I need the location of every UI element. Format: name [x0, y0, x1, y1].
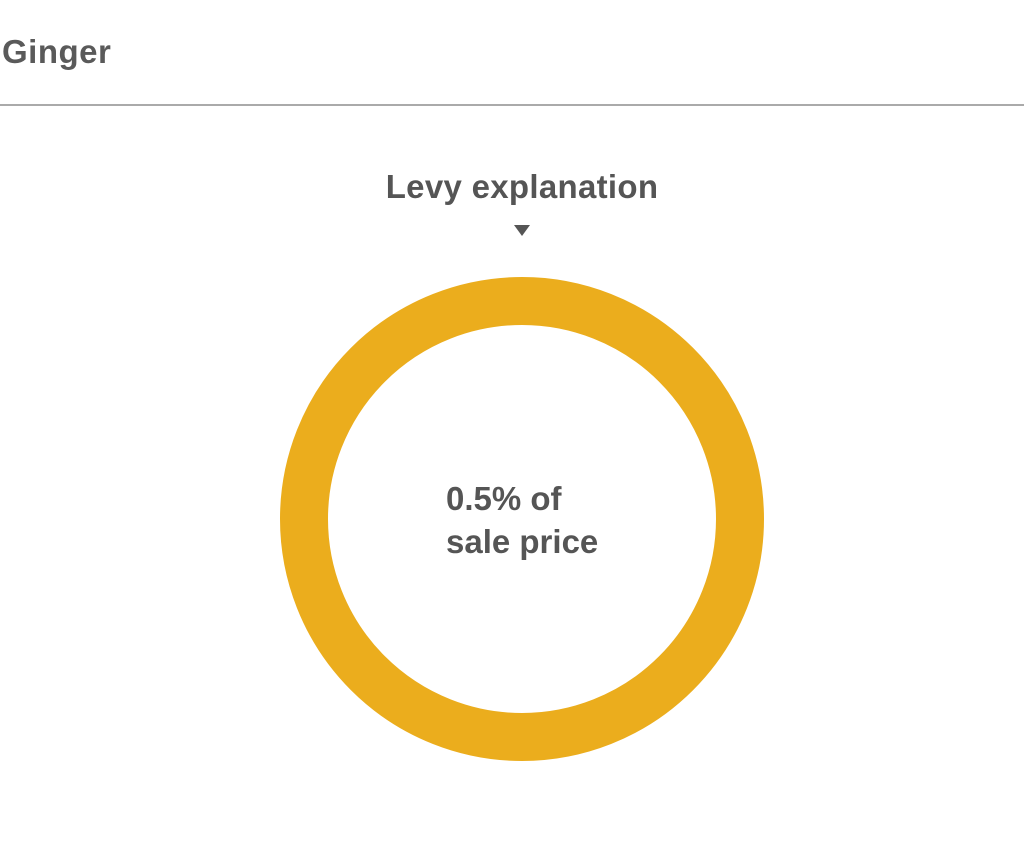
center label: sale price — [446, 523, 598, 560]
heading: Levy explanation: Levy explanation — [386, 168, 658, 205]
center label — [446, 480, 598, 560]
title: Ginger — [2, 33, 111, 70]
arrow: down triangle — [514, 225, 530, 236]
center label: 0.5% of — [446, 480, 562, 517]
header divider line — [0, 104, 1024, 106]
